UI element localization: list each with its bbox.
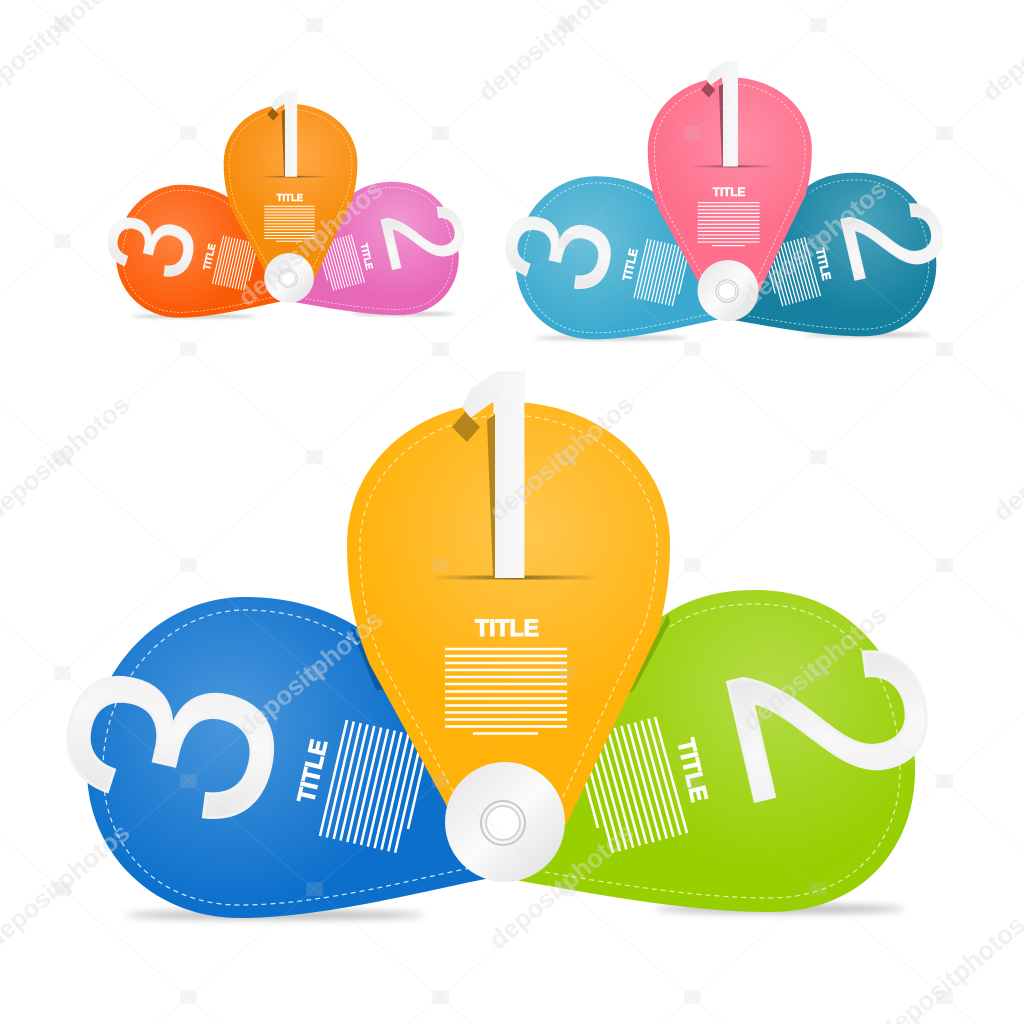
- panel: step 2: TITLE: [358, 242, 374, 271]
- panel: step 2: 2: [354, 195, 489, 283]
- infographic: large blue yellow green: [0, 299, 995, 919]
- panel: step 3: 3: [0, 638, 344, 852]
- watermark text: depositphotos: [483, 817, 639, 955]
- watermark text: depositphotos: [483, 389, 639, 527]
- watermark text: depositphotos: [232, 174, 388, 312]
- panel: step 2: [518, 590, 928, 912]
- panel: step 3: TITLE: [620, 247, 641, 282]
- panel: step 1: TITLE: [475, 615, 539, 642]
- panel: step 2: TITLE: [813, 247, 834, 282]
- panel: step 3: [108, 184, 281, 318]
- panel: step 2: 2: [669, 614, 995, 827]
- panel: step 3: 3: [82, 205, 226, 294]
- panel: step 1: [224, 92, 358, 280]
- panel: step 3: 3: [473, 201, 650, 310]
- panel: step 2: 2: [811, 185, 976, 293]
- panel: step 2: 2: [808, 189, 973, 297]
- panel: step 1: TITLE: [277, 193, 304, 204]
- panel: step 3: 3: [469, 197, 646, 306]
- panel: step 3: TITLE: [293, 737, 333, 805]
- panel: step 3: [66, 597, 486, 918]
- watermark text: depositphotos: [736, 174, 892, 312]
- panel: step 3: 3: [79, 202, 223, 291]
- panel: step 1: 1: [249, 61, 327, 218]
- disc: [445, 762, 565, 882]
- ground shadow: [132, 312, 455, 318]
- panel: step 3: [506, 176, 718, 340]
- panel: step 2: 2: [357, 192, 491, 280]
- panel: step 2: [734, 172, 942, 336]
- panel: step 1: 1: [679, 25, 775, 218]
- panel: step 2: 2: [663, 621, 989, 834]
- ground shadow: [125, 905, 905, 919]
- disc: [264, 253, 314, 303]
- panel: step 1: [347, 372, 670, 825]
- panel: step 2: [294, 182, 464, 316]
- watermark text: depositphotos: [232, 604, 388, 742]
- infographic: small red orange pink: [79, 61, 491, 318]
- panel: step 1: [648, 62, 812, 292]
- panel: step 1: 1: [408, 299, 598, 679]
- infographic: medium blue pink teal: [506, 62, 942, 342]
- ground shadow: [535, 333, 931, 340]
- panel: step 3: TITLE: [202, 243, 219, 271]
- panel: step 3: 3: [3, 646, 351, 860]
- panel: step 2: TITLE: [672, 736, 712, 804]
- disc: [698, 260, 759, 321]
- panel: step 1: TITLE: [713, 185, 745, 199]
- watermark text: depositphotos: [736, 599, 892, 737]
